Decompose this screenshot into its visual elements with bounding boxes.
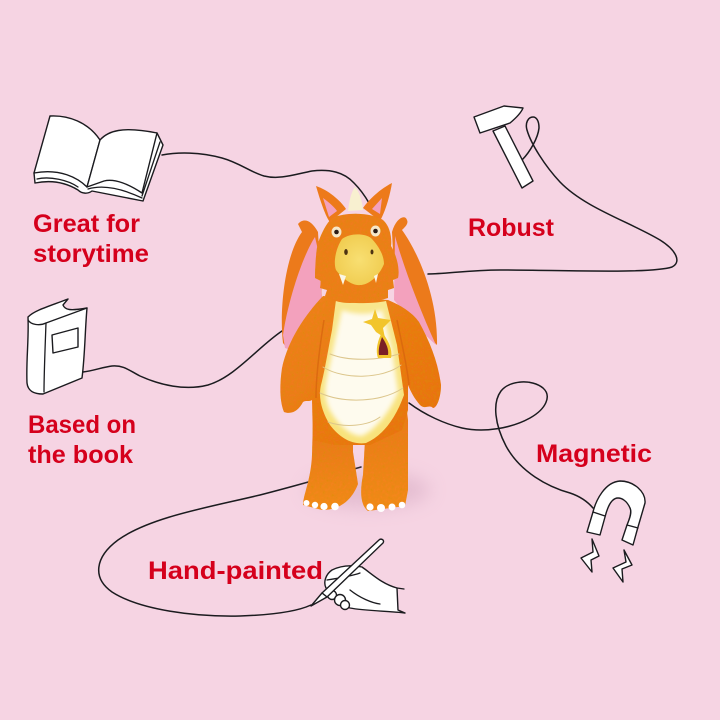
dragon figure [280,183,441,512]
star badge [363,309,391,338]
fangs [339,274,378,285]
right wing [392,217,437,345]
connector line: closed book to dragon [83,331,282,387]
legs [303,395,408,511]
icon: hammer [474,106,533,188]
icon: open book [34,116,163,201]
connector line: dragon to magnet [409,382,593,508]
label: Robust: Robust [468,214,555,242]
arm shading [316,320,409,398]
toes [304,500,405,512]
head [315,214,399,303]
icon: magnet [581,481,645,582]
right ear [363,183,392,221]
horn [348,187,363,211]
connector line: book to dragon [162,153,369,203]
label: Great for storytime: storytime [33,240,149,268]
label: Magnetic: Magnetic [536,440,652,468]
connector line: dragon to pen [99,467,361,616]
label: Hand-painted: Hand-painted [148,557,323,585]
left ear [316,186,346,222]
label: Great for storytime: Great for [33,210,140,238]
eyes and nostrils [332,226,380,255]
icon: hand holding pen [311,539,405,613]
snout [335,234,384,285]
label: Based on the book: Based on [28,411,136,439]
connector line: hammer loop to dragon [428,117,677,274]
belly [320,300,404,443]
torso and arms [280,296,441,445]
badge wound [377,332,391,358]
left wing [282,220,322,352]
icon: closed book [27,299,87,394]
label: Based on the book: the book [28,441,133,469]
ground shadow [306,472,430,508]
